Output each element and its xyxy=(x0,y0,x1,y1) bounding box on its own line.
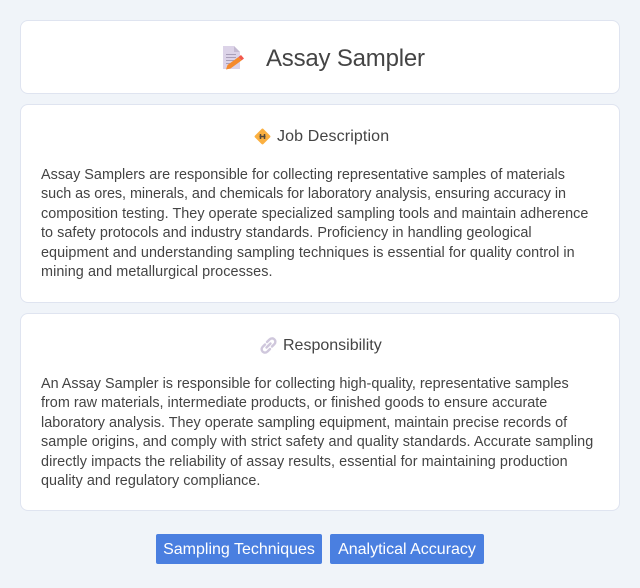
panel: responsibility xyxy=(20,313,620,511)
text: responsibility: quality and regulatory compliance. xyxy=(41,473,260,489)
heading: job description: Job Description xyxy=(277,128,389,145)
text: responsibility: directly impacts the reliability of assay results, essential for maintaining production xyxy=(41,454,568,470)
text: responsibility: An Assay Sampler is responsible for collecting high-quality, representative samples xyxy=(41,376,569,392)
icon: link xyxy=(260,337,276,354)
text: job description: such as ores, minerals, and chemicals for laboratory analysis, ensuring accuracy in xyxy=(41,186,566,202)
text: responsibility: from raw materials, intermediate products, or finished goods to ensure accurate xyxy=(41,395,547,411)
text: job description: equipment and understanding sampling techniques is essential for quality control in xyxy=(41,245,575,261)
icon: diamond sign xyxy=(254,128,270,144)
title: Assay Sampler xyxy=(266,45,425,72)
text: responsibility: sample origins, and comply with strict safety and quality standards. Accurate sampling xyxy=(41,434,593,450)
header card xyxy=(20,20,620,94)
text: job description xyxy=(41,167,588,280)
text: job description: to safety protocols and industry standards. Proficiency in handling geological xyxy=(41,225,532,241)
text: job description: mining and metallurgical processes. xyxy=(41,264,273,280)
tag: analytical accuracy xyxy=(330,534,484,564)
heading: responsibility: Responsibility xyxy=(283,337,382,354)
text: job description: composition testing. They operate specialized sampling tools and maintain adherence xyxy=(41,206,588,222)
icon: document with pencil xyxy=(223,46,244,70)
tag: sampling techniques: Sampling Techniques xyxy=(163,541,315,558)
panel: job description xyxy=(20,104,620,303)
text: job description: Assay Samplers are responsible for collecting representative samples of materials xyxy=(41,167,565,183)
tag: analytical accuracy: Analytical Accuracy xyxy=(338,541,476,558)
text: responsibility: laboratory analysis. They operate sampling equipment, maintain precise records of xyxy=(41,415,567,431)
tag: sampling techniques xyxy=(156,534,322,564)
